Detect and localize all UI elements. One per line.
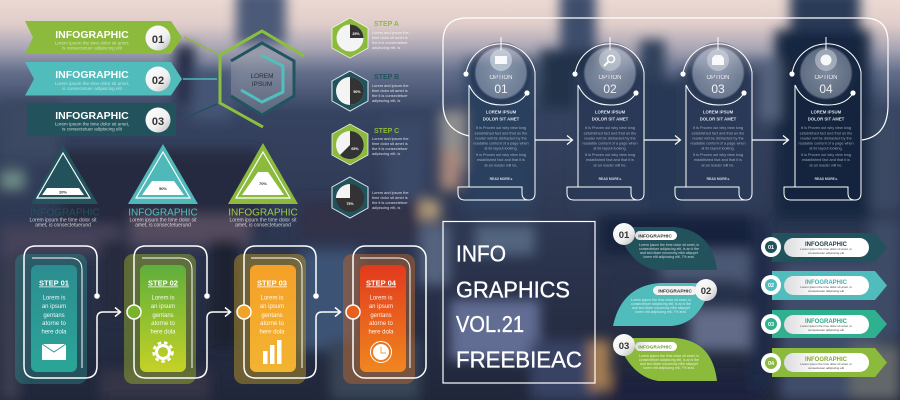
option 02 card xyxy=(567,37,644,200)
leaf 03: INFOGRAPHIC xyxy=(638,344,672,350)
arrow row 01: INFOGRAPHIC xyxy=(805,242,848,248)
step 03 card: an ipsum xyxy=(260,304,284,310)
option 03 card: DOLOR SIT AMET xyxy=(700,116,737,122)
arrow row 01: Lorem ipsum the time dolor sit amet, is xyxy=(800,247,852,251)
title box: INFO xyxy=(456,240,506,266)
ribbon 02: is consectetuer adipiscing elit xyxy=(62,86,123,91)
triangle chart 70%: Lorem ipsum the time dolor sit xyxy=(230,218,297,224)
leaf 01: and sed diam nonummy nibh aliquyet xyxy=(640,251,698,255)
hexagon pie: step D: adipiscing elit, is xyxy=(372,205,400,210)
triangle chart 50%: 50% xyxy=(159,186,167,191)
arrow row 03: consectetuer adipiscing elit xyxy=(808,328,844,332)
title box: FREEBIEAC xyxy=(456,346,582,372)
option 04 card: OPTION xyxy=(814,75,838,81)
option 02 card: readable content of a page when xyxy=(582,142,638,146)
leaf 02: consectetuer adipiscing elit, is an it the xyxy=(631,302,691,306)
ribbon 01: 01 xyxy=(152,34,164,46)
step 03 card xyxy=(234,246,340,384)
leaf 02: and sed diam nonummy nibh aliquyet xyxy=(632,306,690,310)
option 01 card: It is Proven out why view long xyxy=(476,126,526,130)
hexagon pie: step C: 65% xyxy=(351,147,359,151)
triangle chart 70%: amet, is consectetuerund xyxy=(235,222,291,228)
option 03 card: OPTION xyxy=(706,75,730,81)
arrow row 04 xyxy=(761,348,887,377)
hexagon pie: step C: adipiscing elit, is xyxy=(372,151,400,156)
triangle chart 50% xyxy=(128,144,198,228)
hexagon pie: step B: Lorem and ipsum the xyxy=(372,83,409,88)
step 04 card: STEP 04 xyxy=(366,278,397,288)
step 03 card: Lorem is xyxy=(260,296,284,302)
step 02 card: STEP 02 xyxy=(148,278,178,288)
hexagon pie: step C: Lorem and ipsum the xyxy=(372,136,409,141)
option 04 card: It is Proven out why view long xyxy=(801,126,851,130)
hexagon: lorem ipsum xyxy=(220,31,304,127)
step 04 card xyxy=(343,246,426,384)
ribbon 01: Lorem ipsum the time dolor sit amet, xyxy=(55,40,129,46)
step 04 card: gentans xyxy=(370,313,392,319)
outer option frame xyxy=(443,18,888,144)
leaf 02 xyxy=(613,279,717,326)
arrow row 03: Lorem ipsum the time dolor sit amet, is xyxy=(800,324,852,328)
option 03 card: established fact and that it is xyxy=(694,158,742,162)
hexagon: lorem ipsum: LOREM xyxy=(250,73,274,80)
option 01 card: at its layout looking. xyxy=(484,146,518,150)
option 02 card: reader will be distracted by the xyxy=(584,136,636,140)
arrow row 04: consectetuer adipiscing elit xyxy=(808,366,844,370)
step 02 card xyxy=(124,246,230,384)
option 04 card: at an reader will be. xyxy=(809,164,843,168)
triangle chart 50%: Lorem ipsum the time dolor sit xyxy=(130,218,197,224)
triangle chart 20%: INFOGRAPHIC xyxy=(30,208,100,218)
hexagon pie: step B: adipiscing elit, is xyxy=(372,98,400,103)
arrow row 03: INFOGRAPHIC xyxy=(805,319,848,325)
triangle chart 20%: Lorem ipsum the time dolor sit xyxy=(30,218,97,224)
option 01 card: It is Proven out why view long xyxy=(476,153,526,157)
step 04 card: here dola xyxy=(368,330,394,336)
hexagon pie: step A: time dolor sit amet is xyxy=(372,35,408,40)
step 02 card: gentans xyxy=(152,313,174,319)
hexagon pie: step B: time dolor sit amet is xyxy=(372,88,408,93)
hexagon pie: step B xyxy=(332,71,409,111)
step 01 card: an ipsum xyxy=(42,304,66,310)
option 01 card: OPTION xyxy=(489,75,513,81)
ribbon 01: INFOGRAPHIC xyxy=(55,29,129,41)
option 02 card: at its layout looking. xyxy=(593,146,627,150)
leaf 01: INFOGRAPHIC xyxy=(638,234,672,240)
option 01 card: 01 xyxy=(494,82,508,96)
triangle chart 20% xyxy=(30,145,100,228)
arrow row 04: INFOGRAPHIC xyxy=(805,357,848,363)
option 01 card: established fact and that an the xyxy=(475,132,527,136)
ribbon 03 xyxy=(27,103,176,136)
leaf 02: INFOGRAPHIC xyxy=(658,288,692,294)
option 03 card: LOREM IPSUM xyxy=(703,110,734,114)
option 04 card: established fact and that it is xyxy=(802,158,850,162)
option 02 card: It is Proven out why view long xyxy=(585,153,635,157)
step 04 card: atorne to xyxy=(369,321,394,327)
leaf 03: consectetuer adipiscing elit, is an it the xyxy=(639,358,699,362)
triangle chart 50%: amet, is consectetuerund xyxy=(135,222,191,228)
option 03 card: It is Proven out why view long xyxy=(693,126,743,130)
step 01 card: STEP 01 xyxy=(39,278,69,288)
step 02 card: Lorem is xyxy=(151,296,175,302)
hexagon pie: step C xyxy=(332,124,409,165)
hexagon pie: step C: time dolor sit amet is xyxy=(372,141,408,146)
option 04 card: established fact and that an the xyxy=(800,132,852,136)
hexagon pie: step A xyxy=(332,18,409,58)
hexagon pie: step A: STEP A xyxy=(374,21,399,28)
triangle chart 20%: 20% xyxy=(59,190,67,194)
arrow row 01: 01 xyxy=(768,245,774,251)
option 04 card: LOREM IPSUM xyxy=(811,110,842,114)
option 02 card: established fact and that an the xyxy=(584,132,636,136)
option 02 card: READ MORE ▸ xyxy=(599,177,622,181)
leaf 03: and sed diam nonummy nibh aliquyet xyxy=(640,362,698,366)
option 03 card: reader will be distracted by the xyxy=(692,136,744,140)
option 03 card: at its layout looking. xyxy=(701,146,735,150)
arrow row 02: Lorem ipsum the time dolor sit amet, is xyxy=(800,285,852,289)
leaf 03 xyxy=(613,334,717,381)
ribbon 02: Lorem ipsum the time dolor sit amet, xyxy=(55,81,129,86)
option 02 card: 02 xyxy=(603,82,617,96)
option 03 card: at an reader will be. xyxy=(701,164,735,168)
triangle chart 70%: 70% xyxy=(259,181,267,186)
arrow row 04: 04 xyxy=(768,361,775,367)
hexagon pie: step A: the it is consectetuer xyxy=(372,40,408,45)
option 02 card: DOLOR SIT AMET xyxy=(592,116,629,122)
hexagon: lorem ipsum: IPSUM xyxy=(252,81,272,88)
step 03 card: gentans xyxy=(261,313,283,319)
step 03 card: here dola xyxy=(259,330,285,336)
option 03 card: established fact and that an the xyxy=(692,132,744,136)
step 01 card: atorne to xyxy=(42,321,67,327)
option 04 card: It is Proven out why view long xyxy=(801,153,851,157)
option 04 card: DOLOR SIT AMET xyxy=(808,116,845,122)
option 04 card xyxy=(784,37,861,200)
ribbon 02: INFOGRAPHIC xyxy=(55,69,129,81)
title box: VOL.21 xyxy=(456,311,524,337)
step 02 card: atorne to xyxy=(151,321,176,327)
hexagon pie: step D xyxy=(332,177,409,218)
triangle chart 70%: INFOGRAPHIC xyxy=(228,208,298,218)
leaf 01: Lorem ipsum the time dolor sit amet, is xyxy=(639,243,699,247)
ribbon 03: 03 xyxy=(152,116,164,128)
leaf 02: 02 xyxy=(701,286,711,297)
option 02 card: LOREM IPSUM xyxy=(595,110,626,114)
option 01 card xyxy=(458,37,535,200)
arrow row 02: 02 xyxy=(768,283,774,289)
arrow row 02: consectetuer adipiscing elit xyxy=(808,289,844,293)
panel: ribbon list xyxy=(25,21,218,136)
hexagon pie: step D: the it is consectetuer xyxy=(372,200,408,205)
arrow row 04: Lorem ipsum the time dolor sit amet, is xyxy=(800,362,852,366)
leaf 01: 01 xyxy=(619,230,630,241)
hexagon pie: step A: adipiscing elit, is xyxy=(372,45,400,50)
leaf 02: lorem elit adipiscing elit, 7% erat. xyxy=(635,310,687,314)
step 01 card: gentans xyxy=(43,313,65,319)
leaf 01 xyxy=(613,223,717,270)
option 04 card: 04 xyxy=(819,82,833,96)
arrow row 03: 03 xyxy=(768,322,774,328)
option 03 card: READ MORE ▸ xyxy=(707,177,730,181)
leaf 03: lorem elit adipiscing elit, 7% erat. xyxy=(643,366,695,370)
step 04 card: an ipsum xyxy=(369,304,393,310)
option 03 card: readable content of a page when xyxy=(690,142,746,146)
option 02 card: established fact and that it is xyxy=(586,158,634,162)
hexagon pie: step A: Lorem and ipsum the xyxy=(372,30,409,35)
title box xyxy=(443,222,595,383)
step 04 card: Lorem is xyxy=(369,296,393,302)
hexagon pie: step B: STEP B xyxy=(374,74,399,81)
option 04 card: reader will be distracted by the xyxy=(800,136,852,140)
step 03 card: STEP 03 xyxy=(257,278,287,288)
option 01 card: reader will be distracted by the xyxy=(475,136,527,140)
leaf 02: Lorem ipsum the time dolor sit amet, is xyxy=(631,298,691,302)
step 02 card: here dola xyxy=(150,330,176,336)
arrow row 01 xyxy=(761,233,887,262)
hexagon pie: step B: the it is consectetuer xyxy=(372,93,408,98)
ribbon 03: Lorem ipsum the time dolor sit amet, xyxy=(55,122,129,126)
ribbon 01 xyxy=(25,21,182,54)
step 01 card: Lorem is xyxy=(42,296,66,302)
option 04 card: readable content of a page when xyxy=(798,142,854,146)
option 02 card: It is Proven out why view long xyxy=(585,126,635,130)
hexagon pie: step C: STEP C xyxy=(374,128,399,135)
ribbon 01: is consectetuer adipiscing elit xyxy=(62,46,123,50)
triangle chart 70% xyxy=(228,143,298,228)
option 04 card: at its layout looking. xyxy=(809,146,843,150)
step 01 card xyxy=(15,246,120,384)
ribbon 03: INFOGRAPHIC xyxy=(55,110,129,122)
option 01 card: READ MORE ▸ xyxy=(490,177,513,181)
option 01 card: LOREM IPSUM xyxy=(486,110,517,114)
option 01 card: established fact and that it is xyxy=(477,158,525,162)
arrow row 02: INFOGRAPHIC xyxy=(805,280,848,286)
triangle chart 50%: INFOGRAPHIC xyxy=(128,208,198,218)
hexagon pie: step C: the it is consectetuer xyxy=(372,146,408,151)
hexagon pie: step B: 50% xyxy=(353,90,361,94)
hexagon pie: step A: 25% xyxy=(352,32,360,36)
option 01 card: readable content of a page when xyxy=(473,142,529,146)
triangle chart 20%: amet, is consectetuerund xyxy=(35,222,91,228)
leaf 03: Lorem ipsum the time dolor sit amet, is xyxy=(639,354,699,358)
hexagon pie: step D: time dolor sit amet is xyxy=(372,195,408,200)
option 01 card: at an reader will be. xyxy=(484,164,518,168)
timeline arrows xyxy=(761,225,887,385)
ribbon 03: is consectetuer adipiscing elit xyxy=(62,126,123,132)
leaf 01: consectetuer adipiscing elit, is an it the xyxy=(639,247,699,251)
option 01 card: DOLOR SIT AMET xyxy=(483,116,520,122)
option 03 card: 03 xyxy=(711,82,725,96)
step 02 card: an ipsum xyxy=(151,304,175,310)
arrow row 03 xyxy=(761,310,887,338)
title box: GRAPHICS xyxy=(456,276,570,302)
leaf 03: 03 xyxy=(619,341,629,352)
option 02 card: OPTION xyxy=(598,75,622,81)
hexagon pie: step D: 75% xyxy=(346,202,354,206)
hexagon pie: step D: Lorem and ipsum the xyxy=(372,190,409,195)
ribbon 02: 02 xyxy=(152,75,164,87)
option 04 card: READ MORE ▸ xyxy=(815,177,838,181)
step 01 card: here dola xyxy=(41,330,67,336)
arrow row 01: consectetuer adipiscing elit xyxy=(808,251,844,255)
arrow row 02 xyxy=(761,271,887,300)
option 03 card: It is Proven out why view long xyxy=(693,153,743,157)
step 03 card: atorne to xyxy=(260,321,285,327)
leaf 01: lorem elit adipiscing elit, 7% erat. xyxy=(643,255,695,259)
option 02 card: at an reader will be. xyxy=(593,164,627,168)
option 03 card xyxy=(675,37,752,200)
ribbon 02 xyxy=(25,62,182,96)
connector lines to hexagon xyxy=(183,37,218,118)
